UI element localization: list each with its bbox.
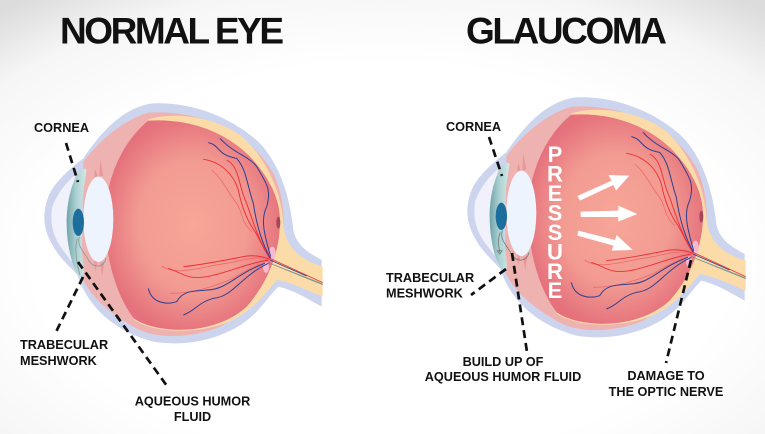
leader: glaucoma trabecular meshwork (471, 269, 506, 295)
lens (506, 171, 536, 256)
label: glaucoma trabecular meshwork: MESHWORK (386, 286, 464, 300)
pressure word (547, 142, 563, 303)
eye diagram: normal eye (44, 103, 323, 343)
leader: optic nerve damage (666, 260, 691, 363)
blood vessels (148, 138, 323, 315)
vitreous body (105, 120, 280, 330)
optic nerve and choroid layer (133, 116, 323, 331)
pressure word: S (548, 200, 562, 226)
pressure word: U (547, 240, 563, 264)
title: glaucoma: GLAUCOMA (466, 11, 667, 52)
leader: normal aqueous humor (78, 262, 167, 386)
iris (496, 203, 507, 230)
pressure word: E (548, 278, 562, 303)
label: glaucoma trabecular meshwork: TRABECULAR (386, 271, 474, 285)
pressure word: R (547, 162, 563, 186)
fluid channel (76, 237, 106, 275)
pressure word: S (548, 220, 562, 245)
title: normal eye: NORMAL EYE (60, 11, 284, 52)
pressure word: P (548, 142, 562, 167)
label: trabecular meshwork: MESHWORK (20, 354, 98, 368)
leader: glaucoma cornea (489, 137, 502, 176)
label: cornea: CORNEA (34, 121, 89, 135)
leader: normal trabecular meshwork (55, 277, 83, 334)
leader: build up (512, 253, 527, 352)
arrow: up right (577, 175, 629, 201)
optic disc and fovea (686, 211, 703, 267)
anterior chamber bulge (51, 175, 75, 262)
iris (73, 209, 84, 236)
optic nerve and choroid layer (556, 110, 746, 325)
pressure word: E (548, 181, 562, 206)
label: trabecular meshwork: TRABECULAR (20, 338, 108, 352)
pressure word: R (547, 259, 563, 284)
arrow: down right (577, 231, 633, 251)
label: aqueous humor fluid: AQUEOUS HUMOR (135, 394, 250, 408)
leader: normal cornea (66, 143, 78, 182)
outer sclera layer (44, 103, 322, 343)
pressure arrows (577, 175, 637, 251)
ciliary zone (505, 106, 707, 330)
ciliary streaks (517, 153, 527, 271)
cornea (67, 168, 87, 277)
label: aqueous humor fluid: FLUID (174, 410, 211, 424)
optic disc and fovea (263, 217, 280, 273)
fluid channel with arrow (497, 231, 529, 260)
label: build up of aqueous humor fluid: AQUEOUS HUMOR FLUID (425, 370, 581, 384)
label: damage to the optic nerve: DAMAGE TO (627, 369, 705, 383)
cornea (490, 162, 510, 271)
label: glaucoma cornea: CORNEA (446, 120, 501, 134)
ciliary zone (82, 112, 284, 336)
outer sclera layer (467, 97, 745, 337)
label: damage to the optic nerve: THE OPTIC NERVE (609, 385, 723, 399)
vitreous body (528, 114, 703, 324)
blood vessels (571, 132, 746, 309)
eye diagram: glaucoma (467, 97, 746, 337)
arrow: right (581, 206, 637, 222)
anterior chamber bulge (474, 169, 498, 256)
ciliary streaks (94, 159, 104, 277)
label: build up of aqueous humor fluid: BUILD UP OF (463, 355, 543, 369)
lens (83, 177, 113, 262)
